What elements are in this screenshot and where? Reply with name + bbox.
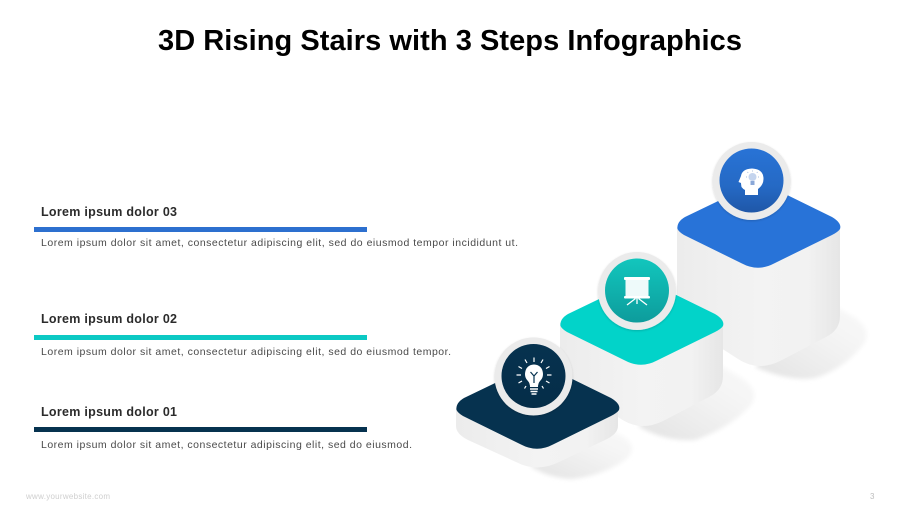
block top: [677, 186, 840, 268]
page number: 3: [870, 492, 875, 501]
badge disc: [605, 258, 669, 322]
description: step 01: Lorem ipsum dolor sit amet, consectetur adipiscing elit, sed do eiusmod.: [41, 439, 412, 451]
block top: [560, 283, 723, 365]
block top: [456, 367, 619, 449]
badge ring: [598, 252, 676, 330]
shadow: [755, 306, 867, 379]
bar: step 02: [34, 335, 367, 340]
icon: light bulb: [516, 358, 552, 394]
badge step 2: presentation board icon: [598, 252, 676, 330]
badge ring: [494, 338, 572, 416]
bar: step 03: [34, 227, 367, 232]
shadow: [530, 430, 632, 479]
heading: step 03: Lorem ipsum dolor 03: [41, 205, 177, 219]
footer website: www.yourwebsite.com: [25, 492, 110, 501]
icon: head with bulb: [738, 168, 764, 195]
bar: step 01: [34, 427, 367, 432]
title: 3D Rising Stairs with 3 Steps Infographics: [158, 25, 742, 57]
description: step 02: Lorem ipsum dolor sit amet, consectetur adipiscing elit, sed do eiusmod tempor.: [41, 346, 451, 358]
badge disc: [720, 148, 784, 212]
block side: [456, 408, 618, 468]
icon: presentation board: [624, 277, 650, 305]
badge step 1: light bulb icon: [494, 338, 572, 416]
badge disc: [502, 344, 566, 408]
stair step 3: blue: [677, 186, 867, 379]
shadow: [638, 364, 754, 440]
block side: [677, 227, 840, 366]
stair step 1: navy: [456, 367, 632, 479]
heading: step 01: Lorem ipsum dolor 01: [41, 405, 177, 419]
heading: step 02: Lorem ipsum dolor 02: [41, 312, 177, 326]
stair step 2: teal: [560, 283, 754, 440]
text block: step 01: [34, 405, 412, 451]
text block: step 02: [34, 312, 451, 358]
badge step 3: head icon: [712, 142, 790, 220]
block side: [560, 323, 723, 426]
description: step 03: Lorem ipsum dolor sit amet, consectetur adipiscing elit, sed do eiusmod tempor incididunt ut.: [41, 237, 518, 249]
text block: step 03: [34, 205, 518, 249]
badge ring: [712, 142, 790, 220]
